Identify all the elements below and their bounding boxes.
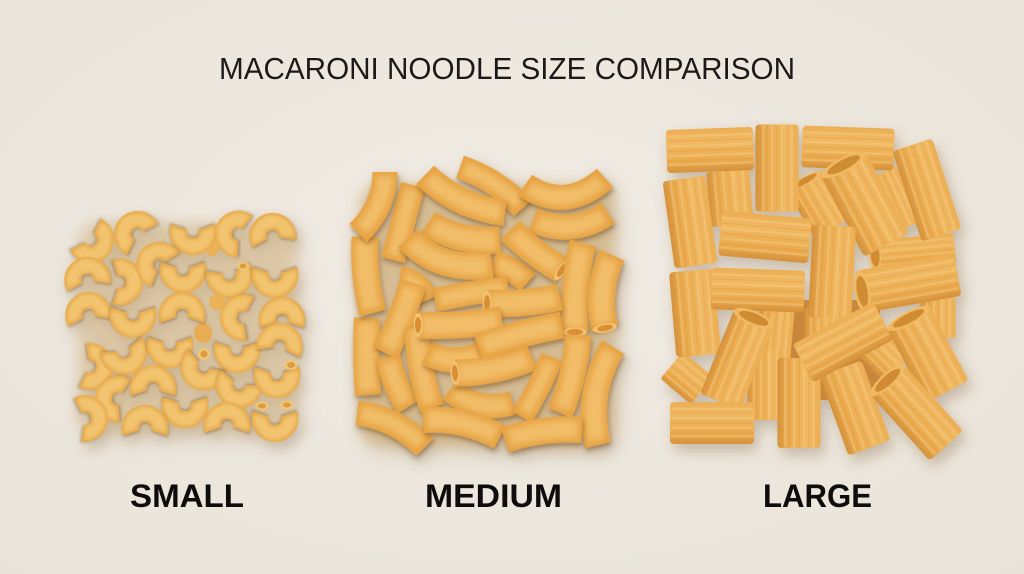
label: small: SMALL <box>130 478 244 514</box>
large macaroni cluster <box>660 124 969 461</box>
medium macaroni cluster <box>357 167 618 447</box>
label: large: LARGE <box>763 478 872 514</box>
small macaroni cluster <box>70 213 298 434</box>
label: medium: MEDIUM <box>425 478 562 514</box>
title: MACARONI NOODLE SIZE COMPARISON <box>219 51 795 86</box>
